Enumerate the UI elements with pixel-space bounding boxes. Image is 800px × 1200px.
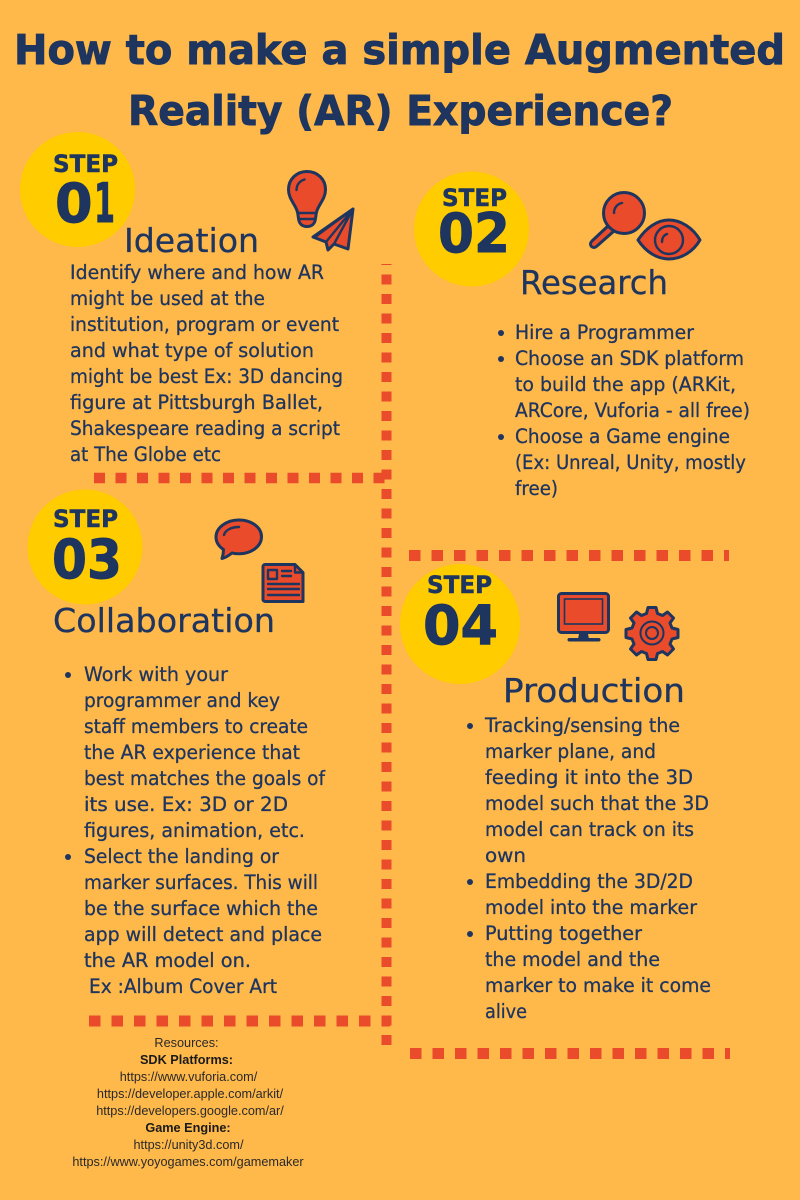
title [14, 26, 785, 135]
text: step 1 description: and what type of solution [70, 339, 314, 362]
list: step 2: Hire a Programmer [515, 321, 695, 344]
list: step 4: Embedding the 3D/2D [485, 870, 693, 893]
list: step 3: its use. Ex: 3D or 2D [84, 793, 288, 816]
icon: paper plane [313, 209, 353, 250]
list: step 4: model into the marker [485, 896, 698, 919]
list: step 4: the model and the [485, 948, 660, 971]
heading: Ideation: Ideation [124, 221, 259, 260]
list: step 3: the AR model on. [84, 949, 251, 972]
list: step 3: marker surfaces. This will [84, 871, 318, 894]
text: step 1 description: might be best Ex: 3D dancing [70, 365, 343, 388]
title: Reality (AR) Experience? [128, 87, 673, 135]
text: step 1 description: Identify where and how AR [70, 261, 324, 284]
title: How to make a simple Augmented [14, 26, 785, 74]
icon: gear [626, 608, 678, 660]
list: step 2: Choose a Game engine [515, 425, 730, 448]
list: step 3 [65, 663, 326, 998]
list: step 4 [467, 714, 711, 1023]
text: resources: Resources: [154, 1036, 219, 1050]
step 2 badge: 02 [438, 202, 510, 265]
step 4 badge: 04 [423, 594, 498, 657]
dotted divider: above step 4 [409, 550, 729, 561]
list: step 3: the AR experience that [84, 741, 300, 764]
text: step 1 description: figure at Pittsburgh Ballet, [70, 391, 323, 414]
text: step 1 description: at The Globe etc [70, 443, 221, 466]
step 4 badge [400, 564, 520, 684]
icon: eye [638, 220, 700, 259]
list: step 3: staff members to create [84, 715, 308, 738]
text: resources: https://www.yoyogames.com/gamemaker [72, 1155, 304, 1169]
icon: magnifying glass [591, 192, 644, 247]
text: resources: https://www.vuforia.com/ [120, 1070, 258, 1084]
text: resources: SDK Platforms: [140, 1053, 233, 1067]
step 2 badge [414, 172, 529, 286]
list: step 4: marker plane, and [485, 740, 656, 763]
icon: light bulb [288, 172, 326, 226]
list: step 4: marker to make it come [485, 974, 711, 997]
text: resources: https://developer.apple.com/arkit/ [97, 1087, 284, 1101]
list: step 4: own [485, 844, 526, 867]
list: step 3: app will detect and place [84, 923, 322, 946]
list: step 3: best matches the goals of [84, 767, 326, 790]
dotted divider: main vertical [382, 264, 392, 1046]
list: step 3: Select the landing or [84, 845, 280, 868]
text: step 1 description: Shakespeare reading a script [70, 417, 340, 440]
text: step 1 description [70, 261, 343, 466]
list: step 4: model such that the 3D [485, 792, 709, 815]
text: resources: https://developers.google.com/ar/ [96, 1104, 284, 1118]
list: step 2: (Ex: Unreal, Unity, mostly [515, 451, 746, 474]
step 1 badge: STEP [53, 150, 118, 178]
text: step 1 description: might be used at the [70, 287, 265, 310]
icon: speech bubble [216, 520, 262, 558]
step 1 badge: 1 [94, 172, 115, 235]
list: step 3: programmer and key [84, 689, 280, 712]
list: step 3: Ex :Album Cover Art [89, 975, 277, 998]
dotted divider: under step 3 [89, 1016, 390, 1026]
step 1 badge [20, 132, 135, 247]
list: step 3: Work with your [84, 663, 229, 686]
step 3 badge: 03 [52, 528, 122, 591]
heading: Collaboration: Collaboration [53, 601, 275, 640]
list: step 3: figures, animation, etc. [84, 819, 305, 842]
step 3 badge: STEP [53, 505, 118, 533]
list: step 2 [498, 321, 750, 500]
text: resources: Game Engine: [145, 1121, 231, 1135]
icon: newspaper [263, 564, 303, 602]
list: step 4: alive [485, 1000, 527, 1023]
list: step 2: Choose an SDK platform [515, 347, 744, 370]
list: step 4: model can track on its [485, 818, 694, 841]
step 3 badge [28, 490, 142, 604]
list: step 2: ARCore, Vuforia - all free) [515, 399, 750, 422]
list: step 3: be the surface which the [84, 897, 318, 920]
text: resources [72, 1036, 304, 1169]
list: step 4: Tracking/sensing the [484, 714, 680, 737]
dotted divider: under step 1 [94, 473, 391, 483]
step 4 badge: STEP [427, 571, 492, 599]
icon: monitor [558, 594, 608, 642]
list: step 2: free) [515, 477, 558, 500]
heading: Research: Research [520, 263, 668, 302]
text: step 1 description: institution, program or event [70, 313, 339, 336]
list: step 4: feeding it into the 3D [485, 766, 693, 789]
step 1 badge: 0 [55, 172, 93, 235]
list: step 2: to build the app (ARKit, [515, 373, 736, 396]
list: step 4: Putting together [485, 922, 643, 945]
step 2 badge: STEP [442, 184, 507, 212]
dotted divider: below step 4 [410, 1048, 730, 1059]
text: resources: https://unity3d.com/ [133, 1138, 244, 1152]
heading: Production: Production [503, 671, 685, 710]
